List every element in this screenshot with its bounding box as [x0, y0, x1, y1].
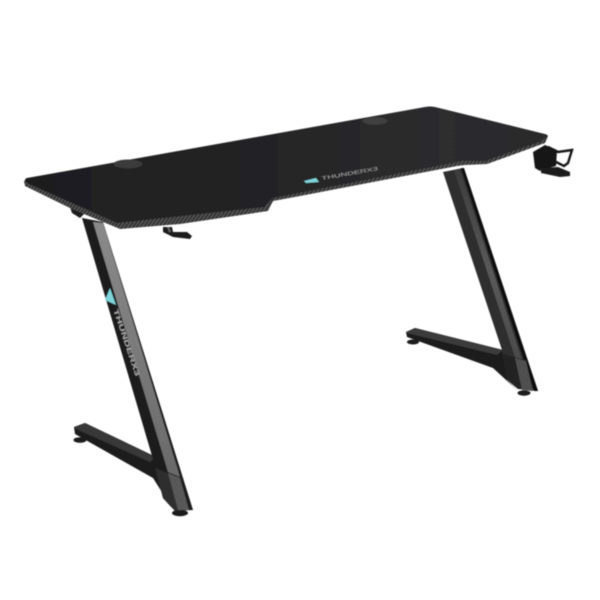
right upright [443, 168, 538, 391]
cup loop [548, 147, 572, 166]
clamp body [533, 145, 557, 171]
desk top [24, 106, 548, 229]
right foot pads [407, 340, 530, 396]
right leg [406, 168, 538, 396]
desk assembly [24, 106, 572, 516]
left upright [82, 218, 193, 511]
right grommet [362, 117, 388, 125]
cup holder [533, 145, 572, 177]
desk logo [304, 166, 379, 183]
bracket under left desk edge [70, 207, 84, 218]
desk surface [25, 106, 548, 223]
base plate [541, 167, 570, 177]
left leg brand text: THUNDERX3 [112, 308, 141, 378]
left leg [74, 218, 193, 516]
left grommet [114, 160, 142, 168]
carbon fibre edge [24, 128, 548, 229]
left foot beam [74, 423, 172, 508]
left foot pads [74, 437, 188, 516]
hook under desk [163, 227, 192, 239]
right foot beam [406, 328, 517, 390]
left leg logo [105, 288, 141, 378]
desk brand text: THUNDERX3 [321, 166, 379, 182]
